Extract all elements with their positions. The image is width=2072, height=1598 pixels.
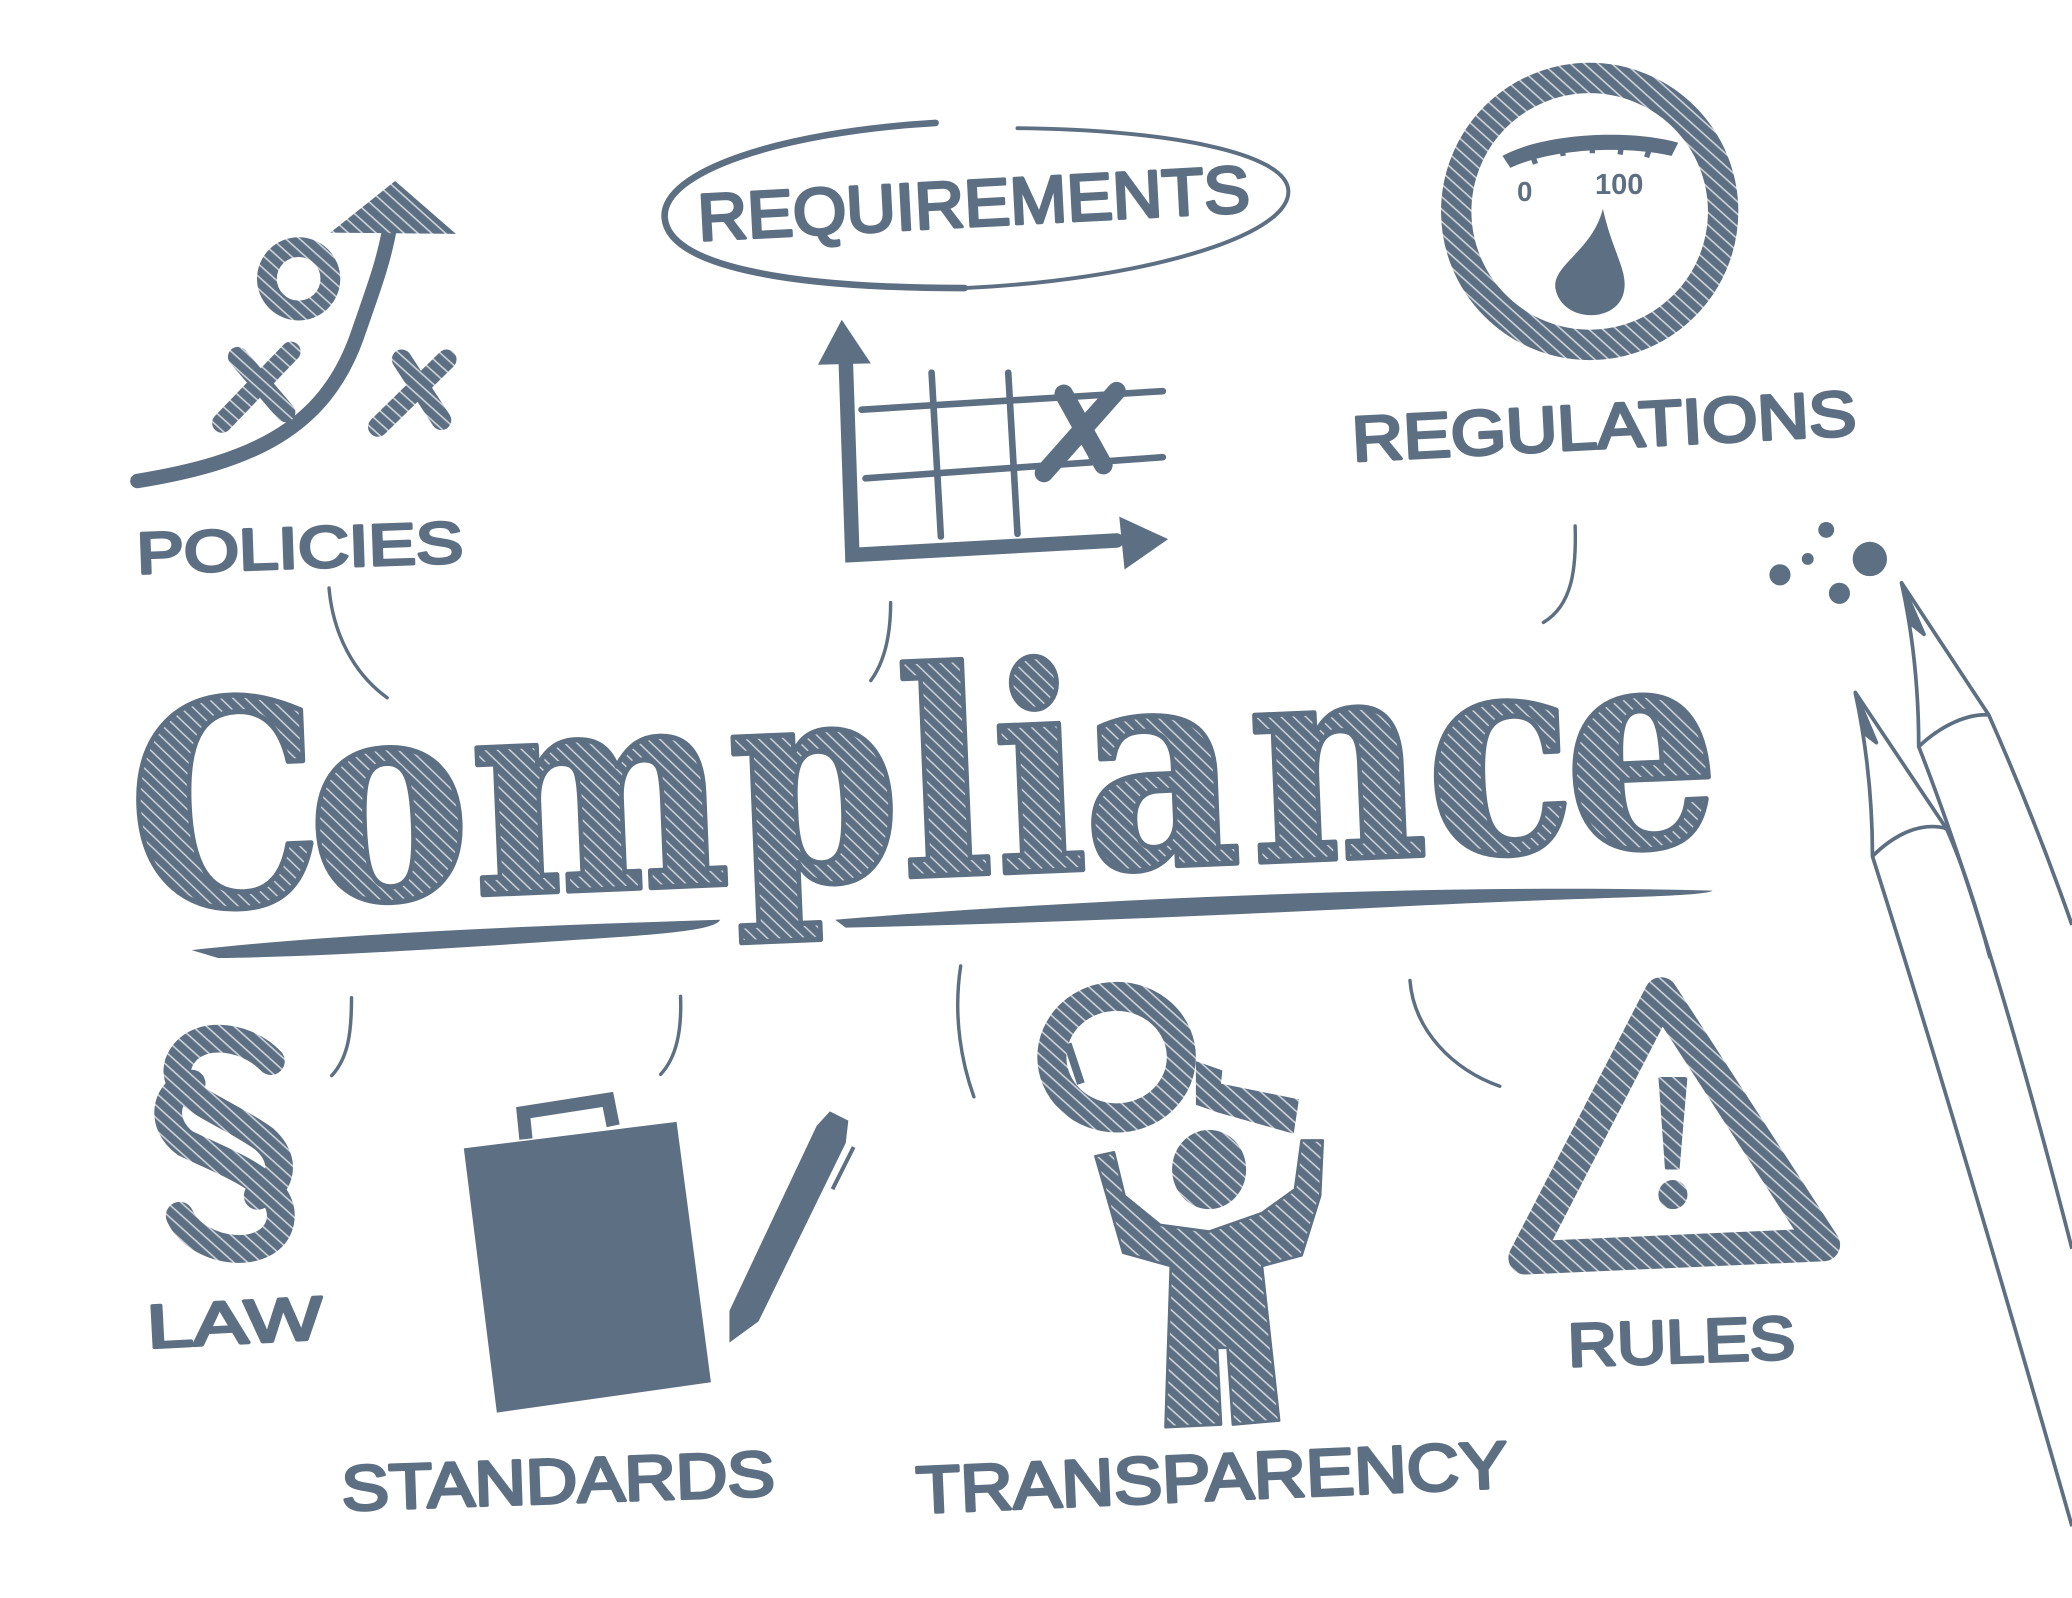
icon: pen (729, 1111, 854, 1343)
icon: clipboard (464, 1099, 711, 1413)
icon: grid chart with arrows (818, 320, 1168, 570)
icon: regulations gauge: 0 (1517, 176, 1532, 207)
title underline (192, 889, 1713, 958)
icon: person with raised arms (1095, 1130, 1323, 1427)
icon: policies play arrow (137, 181, 456, 481)
label: policies: POLICIES (136, 510, 464, 586)
connector lines (329, 526, 1575, 1097)
icon: requirements ellipse (665, 123, 1288, 288)
icon: magnifying glass (1052, 996, 1299, 1134)
title: Compliance: Compliance (122, 578, 1725, 977)
icon: section sign (168, 1039, 281, 1249)
label: transparency: TRANSPARENCY (914, 1428, 1509, 1528)
icon: regulations gauge: 100 (1595, 169, 1643, 201)
label: regulations: REGULATIONS (1350, 379, 1858, 475)
icon: warning triangle (1525, 994, 1824, 1258)
label: requirements: REQUIREMENTS (696, 153, 1251, 255)
label: law: LAW (145, 1284, 325, 1361)
label: rules: RULES (1567, 1303, 1796, 1379)
pencil dots (1769, 522, 1887, 604)
icon: regulations gauge (1456, 78, 1723, 345)
label: standards: STANDARDS (340, 1439, 776, 1524)
icon: pencils (1855, 583, 2072, 1526)
